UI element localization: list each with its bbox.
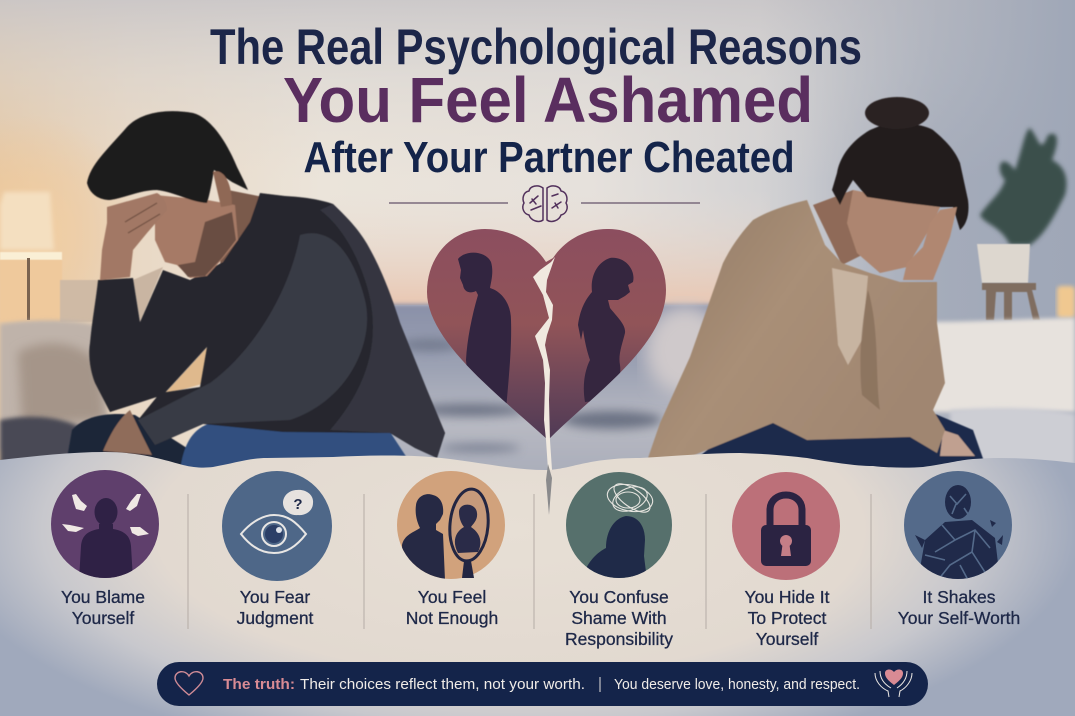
label: To Protect (748, 608, 827, 628)
icon: tangled thoughts (566, 472, 672, 580)
dividers (188, 494, 871, 629)
woman jeans (683, 413, 987, 470)
label: You Feel (418, 587, 486, 607)
icon: brain (523, 186, 567, 221)
woman sleeve fold (860, 290, 880, 410)
title (210, 19, 862, 182)
crack (533, 257, 555, 515)
photo: man (65, 111, 445, 472)
photo: woman (648, 97, 987, 470)
item: You Fear Judgment (222, 471, 332, 628)
icon: hands holding heart (875, 669, 912, 697)
label: You Blame (61, 587, 145, 607)
label: Yourself (72, 608, 134, 628)
icon: person and mirror (397, 471, 505, 580)
woman raised hand (903, 207, 957, 280)
man raised hand (100, 193, 167, 280)
label: You Hide It (745, 587, 830, 607)
man left leg (65, 414, 190, 472)
lamp (0, 192, 54, 250)
right wall (760, 0, 1075, 330)
woman lower hand (940, 430, 975, 456)
icon: eye with question: ? (293, 496, 303, 513)
man beard (178, 212, 236, 277)
man hair (87, 111, 248, 203)
item: It Shakes Your Self-Worth (898, 471, 1020, 628)
title line 2: You Feel Ashamed (283, 64, 813, 136)
man ear (213, 171, 232, 207)
brain divider (389, 186, 700, 221)
label: Judgment (237, 608, 314, 628)
icon: padlock (732, 472, 840, 580)
man sweater (89, 193, 445, 458)
item: You Hide It To Protect Yourself (732, 472, 840, 649)
man face (155, 195, 238, 278)
label: Responsibility (565, 629, 673, 649)
woman silhouette (578, 258, 633, 402)
label: Your Self-Worth (898, 608, 1020, 628)
label: You Fear (240, 587, 310, 607)
banner label: The truth: (223, 676, 295, 693)
woman hair bun (865, 97, 929, 129)
title line 1: The Real Psychological Reasons (210, 19, 862, 75)
man sleeve shade (138, 233, 367, 445)
item: You Blame Yourself (51, 470, 159, 628)
man back shade (320, 204, 445, 458)
bed right (930, 318, 1075, 412)
woman sweater (648, 200, 945, 458)
banner text 2: You deserve love, honesty, and respect. (614, 676, 860, 693)
item: You Feel Not Enough (397, 471, 505, 628)
title line 3: After Your Partner Cheated (304, 133, 794, 182)
woman neck (813, 190, 862, 265)
woman chest highlight (832, 268, 868, 365)
label: Not Enough (406, 608, 498, 628)
label: It Shakes (923, 587, 996, 607)
woman hair (832, 123, 969, 230)
man lower hand (103, 410, 152, 455)
icon: person with pointing fingers (51, 470, 159, 580)
banner text 1: Their choices reflect them, not your worth. (300, 676, 585, 693)
icon: shattered figure (904, 471, 1012, 580)
man jeans (180, 424, 415, 472)
man silhouette (458, 253, 511, 410)
man neck (220, 190, 268, 265)
bottom panel (0, 452, 1075, 716)
bed left (0, 320, 110, 450)
label: Shame With (571, 608, 667, 628)
broken heart (427, 229, 666, 470)
woman face (847, 190, 940, 273)
truth banner (157, 662, 928, 706)
icon: heart outline (175, 672, 203, 695)
icon: eye with question (222, 471, 332, 581)
label: You Confuse (569, 587, 669, 607)
item: You Confuse Shame With Responsibility (565, 472, 673, 649)
plant (980, 128, 1067, 245)
label: Yourself (756, 629, 818, 649)
